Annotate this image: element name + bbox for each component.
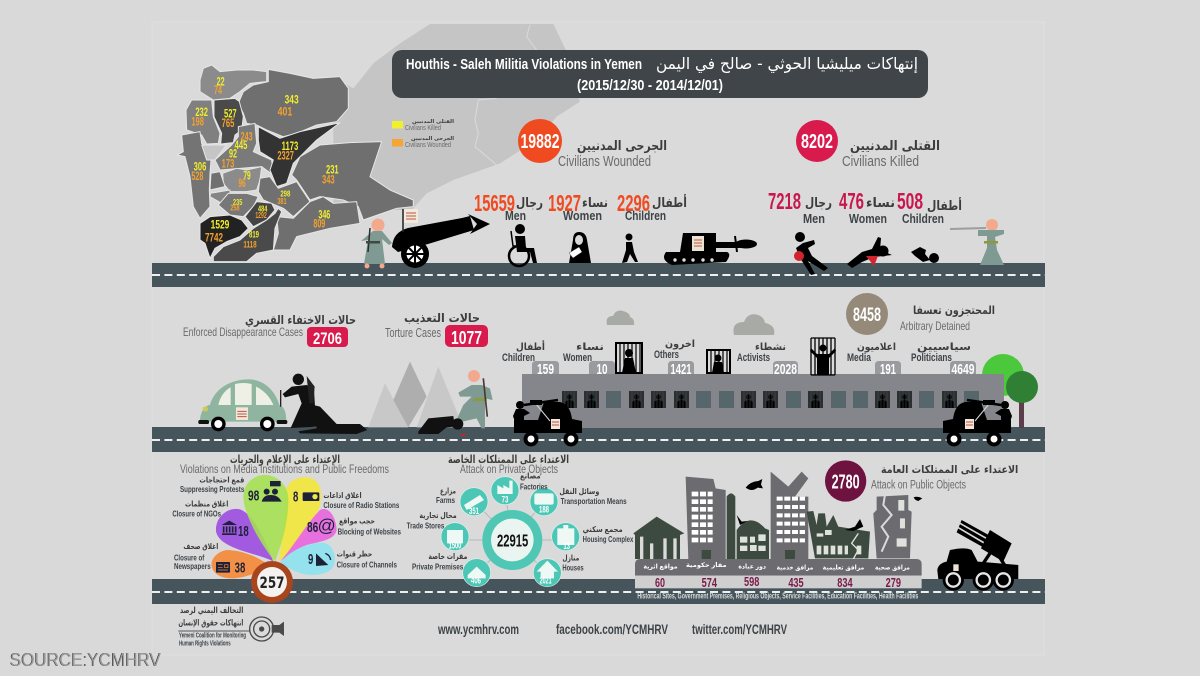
map: governorate numbers: 92 <box>229 148 237 161</box>
map: governorate numbers: 343 <box>285 94 299 107</box>
map: governorate numbers <box>191 76 339 250</box>
private objects heading: الاعتداء على الممتلكات الخاصة <box>448 453 569 466</box>
private objects hub diagram <box>407 472 633 587</box>
killed stats: 508 <box>897 188 923 214</box>
media total badge 257 <box>251 561 293 603</box>
map: governorate numbers: 445 <box>235 139 248 152</box>
plate labels arabic: مرافق صحية <box>875 564 910 571</box>
public objects heading: Attack on Public Objects <box>871 477 966 491</box>
map: governorate numbers: 765 <box>222 117 235 130</box>
media violations labels: اغلاق منظمات <box>185 500 228 509</box>
media violations labels: Closure of NGOs <box>172 508 221 518</box>
road 3 <box>152 579 1045 604</box>
media violations labels: Suppressing Protests <box>180 484 244 494</box>
map of Yemen with governorate figures <box>177 24 580 262</box>
map legend: Civilians Killed <box>405 125 441 132</box>
prison category labels: Women <box>563 352 592 364</box>
map legend: الجرحى المدنيين <box>411 136 454 142</box>
prison count tabs <box>532 361 976 378</box>
public objects heading: 2780 <box>832 471 860 493</box>
petal values: 8 <box>293 488 298 505</box>
wounded stats: رجال <box>516 196 543 211</box>
health building <box>873 495 912 558</box>
map: governorate numbers: 173 <box>222 157 235 170</box>
prison category labels: Media <box>847 352 872 364</box>
civilians wounded heading: 19882 <box>520 131 560 153</box>
private objects hub diagram: Private Premises <box>412 561 463 571</box>
killed stats: Children <box>902 212 944 226</box>
icon: tank <box>664 233 757 265</box>
map: governorate numbers: 22 <box>217 76 225 89</box>
source caption: SOURCE:YCMHRV <box>10 650 161 670</box>
civilians wounded heading: الجرحى المدنيين <box>577 139 667 154</box>
map: governorate numbers: 7742 <box>205 231 223 245</box>
prison category labels: Others <box>654 349 679 361</box>
enforced disappearance heading: Enforced Disappearance Cases <box>183 325 303 339</box>
icon: injured woman <box>569 232 591 263</box>
private objects heading <box>448 453 569 476</box>
private objects hub diagram: Houses <box>562 563 584 573</box>
prison category labels: Politicians <box>911 352 952 364</box>
damaged public buildings <box>633 472 922 559</box>
map: governorate numbers: 1292 <box>255 211 267 220</box>
map: governorate numbers: 96 <box>238 177 246 190</box>
prison category labels: Children <box>502 352 535 364</box>
media violations labels: حظر قنوات <box>337 550 372 559</box>
media violations labels: Closure of Channels <box>337 559 397 569</box>
satellite labels: مقرات خاصة <box>428 552 467 561</box>
media violations labels: اغلاق صحف <box>183 542 218 551</box>
civilians wounded heading <box>518 119 667 170</box>
petal values: 86 <box>307 519 318 536</box>
map: governorate numbers: 1173 <box>282 140 299 153</box>
killed stats <box>768 188 962 226</box>
map: governorate numbers: 1118 <box>243 240 257 250</box>
satellite labels <box>419 472 623 563</box>
road 1 <box>152 263 1045 287</box>
prison windows <box>562 391 979 408</box>
map: governorate numbers: 527 <box>224 107 237 120</box>
public objects heading <box>825 460 1018 502</box>
killed stats: Women <box>849 212 887 226</box>
service building <box>771 472 808 559</box>
civilians killed heading: Civilians Killed <box>842 154 919 170</box>
map: governorate numbers: 819 <box>249 230 259 240</box>
government building <box>686 477 726 559</box>
private objects hub diagram: Trade Stores <box>407 521 444 531</box>
map: governorate numbers: 346 <box>318 209 331 222</box>
private objects hub diagram: 22915 <box>497 530 528 550</box>
public object tally plate <box>635 559 922 601</box>
road 2 <box>152 427 1045 452</box>
map: governorate numbers: 809 <box>313 218 326 231</box>
map: governorate numbers: 381 <box>277 196 287 206</box>
wounded stats: 1927 <box>548 190 581 216</box>
enforced disappearance heading <box>183 313 356 348</box>
plate numbers: 279 <box>886 575 901 590</box>
map: governorate numbers: 232 <box>195 106 208 119</box>
icon: woman in cage <box>616 343 642 373</box>
map: governorate numbers: 401 <box>278 105 293 118</box>
media violations labels: Blocking of Websites <box>338 526 401 536</box>
map: governorate numbers: 231 <box>326 163 339 176</box>
icon: fallen woman <box>847 237 892 268</box>
footer links <box>437 622 787 637</box>
trees <box>982 354 1038 428</box>
religious building <box>727 493 735 559</box>
enforced disappearance heading: 2706 <box>313 329 342 348</box>
map: governorates <box>177 65 413 262</box>
plate labels arabic: دور عبادة <box>738 563 767 570</box>
title banner: (2015/12/30 - 2014/12/01) <box>577 78 723 94</box>
footer links: twitter.com/YCMHRV <box>692 622 787 637</box>
arbitrary detained heading <box>846 293 995 335</box>
plate numbers: 598 <box>744 574 759 589</box>
icon: rocket launcher truck <box>937 520 1018 591</box>
media violations petals: @ <box>318 516 336 536</box>
petal icons <box>216 481 331 573</box>
satellite labels: مجمع سكني <box>583 525 623 534</box>
plate numbers <box>655 574 901 590</box>
private objects hub diagram: Farms <box>436 495 455 505</box>
map: governorate numbers: 79 <box>243 169 251 182</box>
bombs and debris <box>746 479 763 490</box>
arbitrary detained heading: 8458 <box>853 305 881 326</box>
satellite values <box>449 494 570 585</box>
map: governorate numbers: 243 <box>241 130 253 143</box>
petal values: 18 <box>238 523 249 540</box>
icon: soldier shooting <box>950 219 1004 265</box>
map legend: القتلى المدنيين <box>412 119 454 125</box>
logo: Yemeni Coalition for Monitoring: Human Rights Violations <box>179 638 231 647</box>
killed stats: Men <box>803 212 825 226</box>
killed stats: 7218 <box>768 188 801 214</box>
prison building <box>522 361 1004 428</box>
plate labels arabic: مواقع اثرية <box>643 563 678 570</box>
logo: Yemeni Coalition for Monitoring <box>178 605 284 647</box>
satellite values: 2021 <box>540 575 552 585</box>
map: governorate numbers: 198 <box>191 116 204 129</box>
plate labels arabic: مرافق خدمية <box>777 564 813 571</box>
enforced disappearance heading: حالات الاختفاء القسري <box>245 313 356 327</box>
satellite values: 406 <box>471 575 481 585</box>
petal values: 9 <box>308 551 313 568</box>
prison category labels: سياسيين <box>917 342 971 353</box>
icon: soldier at cannon <box>361 218 392 268</box>
satellite labels: وسائل النقل <box>559 487 599 496</box>
killed stats: أطفال <box>927 197 962 214</box>
killed stats: 476 <box>839 188 864 214</box>
satellite labels: منازل <box>562 554 579 563</box>
media violations labels: Closure of Radio Stations <box>323 500 399 510</box>
icon: wheelchair <box>509 224 537 266</box>
torture heading <box>385 311 488 348</box>
icon: soldier torturing prisoner <box>418 370 493 437</box>
footer links: facebook.com/YCMHRV <box>556 622 668 637</box>
plate labels arabic <box>643 562 910 571</box>
prison category labels: نساء <box>576 342 604 353</box>
satellite values: 351 <box>469 506 479 516</box>
map: governorate numbers: 1529 <box>211 218 230 232</box>
icon: cannon <box>392 209 490 268</box>
infographic frame <box>152 22 1044 655</box>
plate numbers: 60 <box>655 575 665 590</box>
title banner: إنتهاكات ميليشيا الحوثي - صالح في اليمن <box>656 54 918 74</box>
prison category labels: Activists <box>737 352 770 364</box>
prison count tabs: 2028 <box>774 361 797 378</box>
civilians killed heading: القتلى المدنيين <box>850 139 940 154</box>
wounded stats: Men <box>505 209 526 223</box>
civilians killed heading: 8202 <box>801 131 833 153</box>
plate numbers: 435 <box>788 575 804 590</box>
satellite values: 188 <box>539 505 549 515</box>
prison count tabs: 159 <box>537 361 554 378</box>
prison count tabs: 4649 <box>952 361 974 378</box>
satellite labels: محال تجارية <box>419 511 457 520</box>
killed stats: نساء <box>866 196 895 211</box>
media violations heading <box>180 453 389 476</box>
title banner <box>392 50 928 98</box>
icon: armed truck left <box>513 400 582 446</box>
source caption: SOURCE:YCMHRV <box>10 650 160 670</box>
map: governorate numbers: 258 <box>230 204 240 213</box>
education building <box>807 511 870 558</box>
wounded stats: أطفال <box>652 194 687 211</box>
prison category labels: أطفال <box>516 340 545 353</box>
icon: armed truck right <box>943 400 1012 446</box>
civilians killed heading <box>796 120 940 170</box>
map legend <box>392 119 454 149</box>
wounded stats: 15659 <box>474 190 515 216</box>
map: governorate numbers: 306 <box>194 160 207 173</box>
arbitrary detained heading: المحتجزون تعسفا <box>913 303 995 318</box>
map legend: Civilians Wounded <box>405 142 451 149</box>
plate numbers: 834 <box>837 575 853 590</box>
prison count tabs: 191 <box>880 361 896 378</box>
satellite values: 1500 <box>449 540 461 550</box>
satellite labels: مزارع <box>440 486 456 495</box>
icon: injured child <box>622 234 638 263</box>
wounded stats: Women <box>563 209 602 223</box>
icon: prisoner holding bars <box>810 338 836 375</box>
wounded stats: نساء <box>582 196 608 211</box>
media violations heading: الإعتداء على الإعلام والحريات <box>230 453 340 466</box>
title banner: Houthis - Saleh Militia Violations in Yemen <box>406 56 642 73</box>
prison category labels <box>502 339 971 364</box>
public objects heading: الاعتداء على الممتلكات العامة <box>881 463 1018 476</box>
private objects hub diagram: Factories <box>520 482 548 492</box>
plate labels english: Historical Sites, Government Premises, Religious Objects, Service Facilities, Education Facilities, Health Facilities <box>637 591 919 601</box>
wounded stats <box>474 190 687 223</box>
map: governorate numbers: 235 <box>233 197 242 207</box>
plate labels arabic: مقار حكومية <box>686 562 727 569</box>
plate labels arabic: مرافق تعليمية <box>823 564 864 571</box>
satellite icons <box>447 481 574 578</box>
logo: Yemeni Coalition for Monitoring: التحالف اليمني لرصد <box>180 605 243 616</box>
footer links: www.ycmhrv.com <box>437 622 519 637</box>
media violations labels: اغلاق اذاعات <box>323 491 362 500</box>
media violations labels <box>172 475 401 571</box>
icon: fallen child <box>911 247 939 263</box>
satellite labels: مصانع <box>520 472 541 481</box>
icon: falling man <box>794 232 828 275</box>
logo: Yemeni Coalition for Monitoring: Yemeni Coalition for Monitoring <box>179 630 246 639</box>
satellite values: 73 <box>502 494 508 504</box>
arbitrary detained heading: Arbitrary Detained <box>900 319 970 333</box>
mountains <box>368 362 463 427</box>
private objects hub diagram: Housing Complex <box>583 534 633 544</box>
torture heading: 1077 <box>451 328 482 348</box>
prison count tabs: 1421 <box>670 361 692 378</box>
private objects hub diagram: Transportation Means <box>561 496 627 506</box>
historical site <box>633 517 684 559</box>
prison count tabs: 10 <box>596 361 608 378</box>
petal values: 98 <box>248 488 259 505</box>
torture heading: Torture Cases <box>385 325 441 340</box>
private objects heading: Attack on Private Objects <box>460 462 558 476</box>
torture heading: حالات التعذيب <box>404 311 480 325</box>
media violations petals <box>211 475 337 578</box>
media violations labels: Closure of <box>174 552 204 562</box>
media violations labels: قمع احتجاجات <box>199 475 244 484</box>
killed stats: رجال <box>805 196 832 211</box>
icon: soldier dragging victim <box>281 374 367 434</box>
satellite values: 13 <box>563 541 570 551</box>
clouds <box>607 311 774 335</box>
map: governorate numbers: 74 <box>214 84 222 97</box>
petal values <box>235 488 318 577</box>
logo: Yemeni Coalition for Monitoring: انتهاكات حقوق الإنسان <box>178 617 243 628</box>
plate numbers: 574 <box>702 575 717 590</box>
map: governorate numbers: 2327 <box>277 150 294 163</box>
civilians wounded heading: Civilians Wounded <box>558 154 651 170</box>
media violations heading: Violations on Media Institutions and Public Freedoms <box>180 462 389 476</box>
petal values: 38 <box>235 560 245 577</box>
satellite circles <box>441 477 580 587</box>
prison category labels: اخرون <box>665 339 695 350</box>
map: eastern territory <box>333 24 580 210</box>
icon: man in cage <box>707 350 730 373</box>
wounded stats: 2296 <box>617 190 650 216</box>
map: governorate numbers: 484 <box>258 205 268 214</box>
prison category labels: اعلاميون <box>857 342 896 353</box>
icon: car <box>198 379 287 431</box>
media violations labels: حجب مواقع <box>339 516 375 525</box>
map: governorate numbers: 528 <box>191 170 204 183</box>
prison category labels: نشطاء <box>755 342 786 353</box>
media total badge 257: 257 <box>260 573 284 592</box>
media violations labels: Newspapers <box>174 561 211 571</box>
map: governorate numbers: 343 <box>322 174 335 187</box>
wounded stats: Children <box>625 209 666 223</box>
map: governorate numbers: 298 <box>280 189 290 199</box>
